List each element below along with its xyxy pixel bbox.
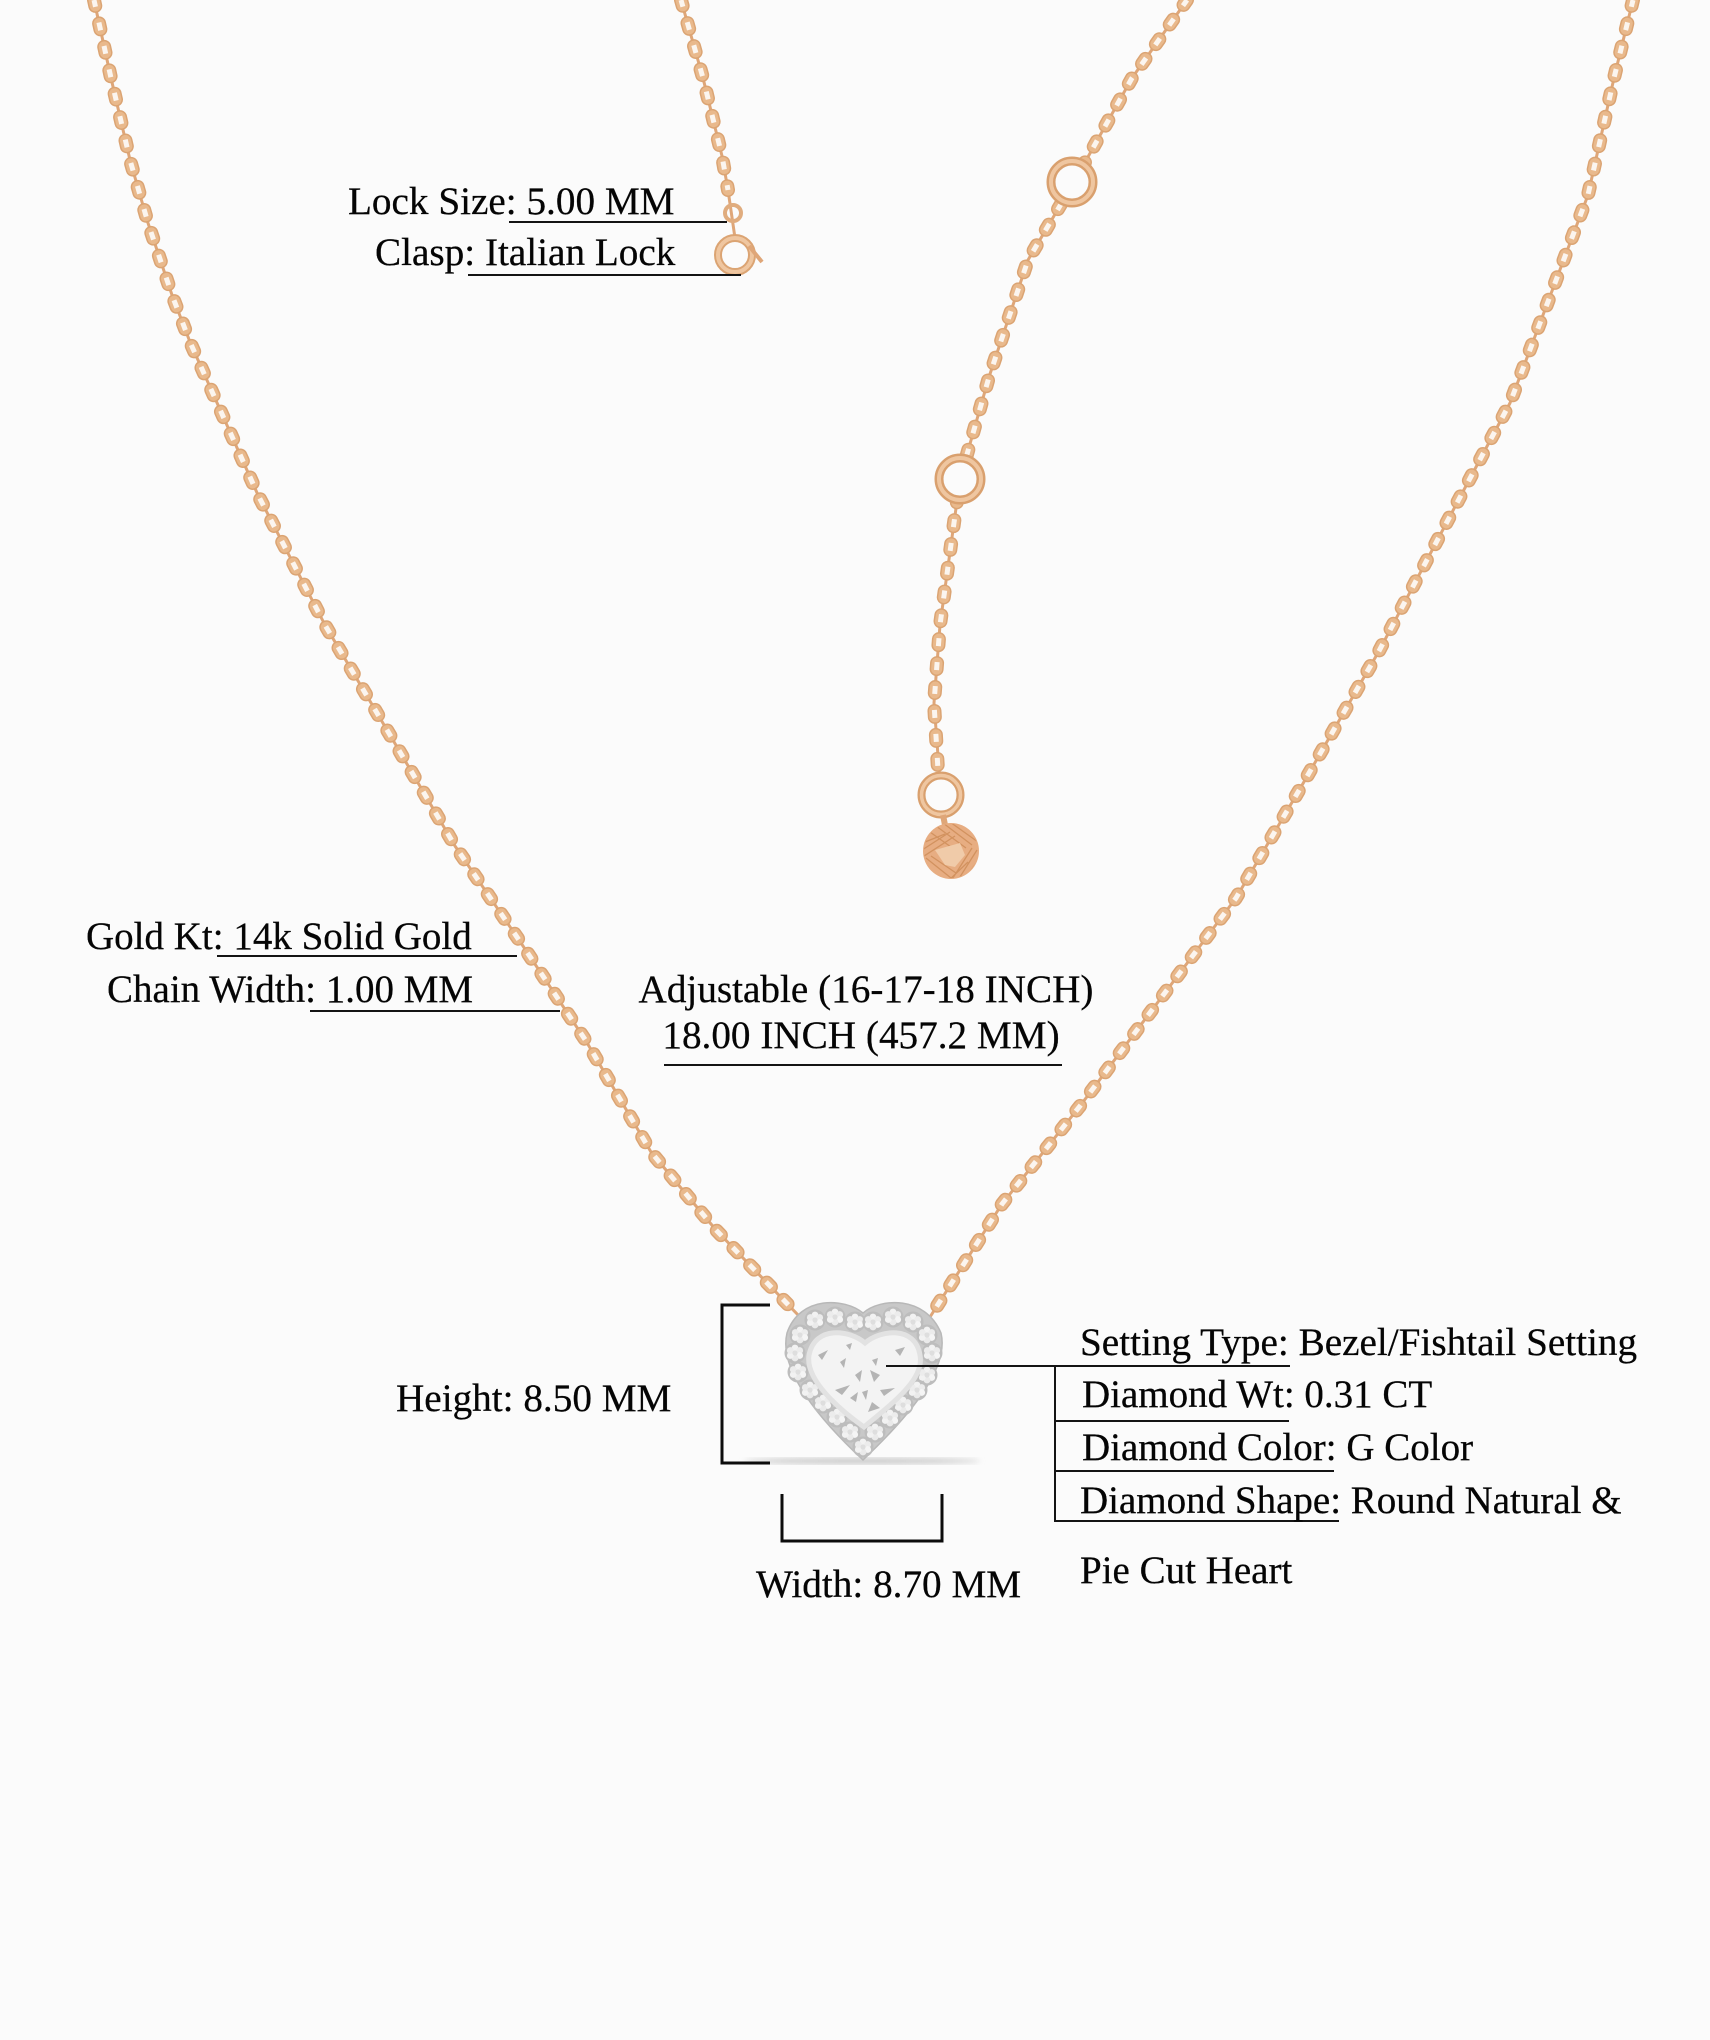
tag charm: [923, 814, 979, 879]
label: width: Width: 8.70 MM: [756, 1563, 1021, 1606]
label: chain length: [639, 968, 1093, 1065]
clasp chain with lock: [681, 0, 762, 272]
necklace infographic: [87, 0, 1640, 1598]
label: chain length: Adjustable (16-17-18 INCH): [639, 968, 1093, 1011]
label: diamond shape: [1080, 1479, 1622, 1592]
left main chain: [94, 0, 800, 1317]
heart setting: [786, 1303, 942, 1460]
right main chain: [930, 0, 1633, 1317]
label: width: [756, 1494, 1021, 1606]
label: diamond weight: Diamond Wt: 0.31 CT: [1082, 1373, 1432, 1416]
label: chain length: 18.00 INCH (457.2 MM): [662, 1014, 1060, 1057]
label: diamond shape: Diamond Shape: Round Natural &: [1080, 1479, 1622, 1522]
label: diamond shape: Pie Cut Heart: [1080, 1549, 1292, 1592]
label: gold karat: Gold Kt: 14k Solid Gold: [86, 915, 472, 958]
label: height: [396, 1305, 770, 1463]
label: clasp: Clasp: Italian Lock: [375, 231, 676, 274]
label: height: Height: 8.50 MM: [396, 1377, 671, 1420]
heart pendant: [784, 1303, 942, 1460]
center stone: [809, 1333, 920, 1427]
extender chain with rings: [922, 0, 1187, 814]
label: diamond color: Diamond Color: G Color: [1082, 1426, 1473, 1469]
label: setting type: Setting Type: Bezel/Fishtail Setting: [1080, 1321, 1637, 1364]
stone facets: [818, 1343, 905, 1412]
leader lines: diamond details: [886, 1366, 1339, 1521]
label: chain width: Chain Width: 1.00 MM: [107, 968, 473, 1011]
halo diamonds: [784, 1306, 942, 1458]
heart shadow: [744, 1458, 980, 1464]
label: lock size: Lock Size: 5.00 MM: [348, 180, 675, 223]
